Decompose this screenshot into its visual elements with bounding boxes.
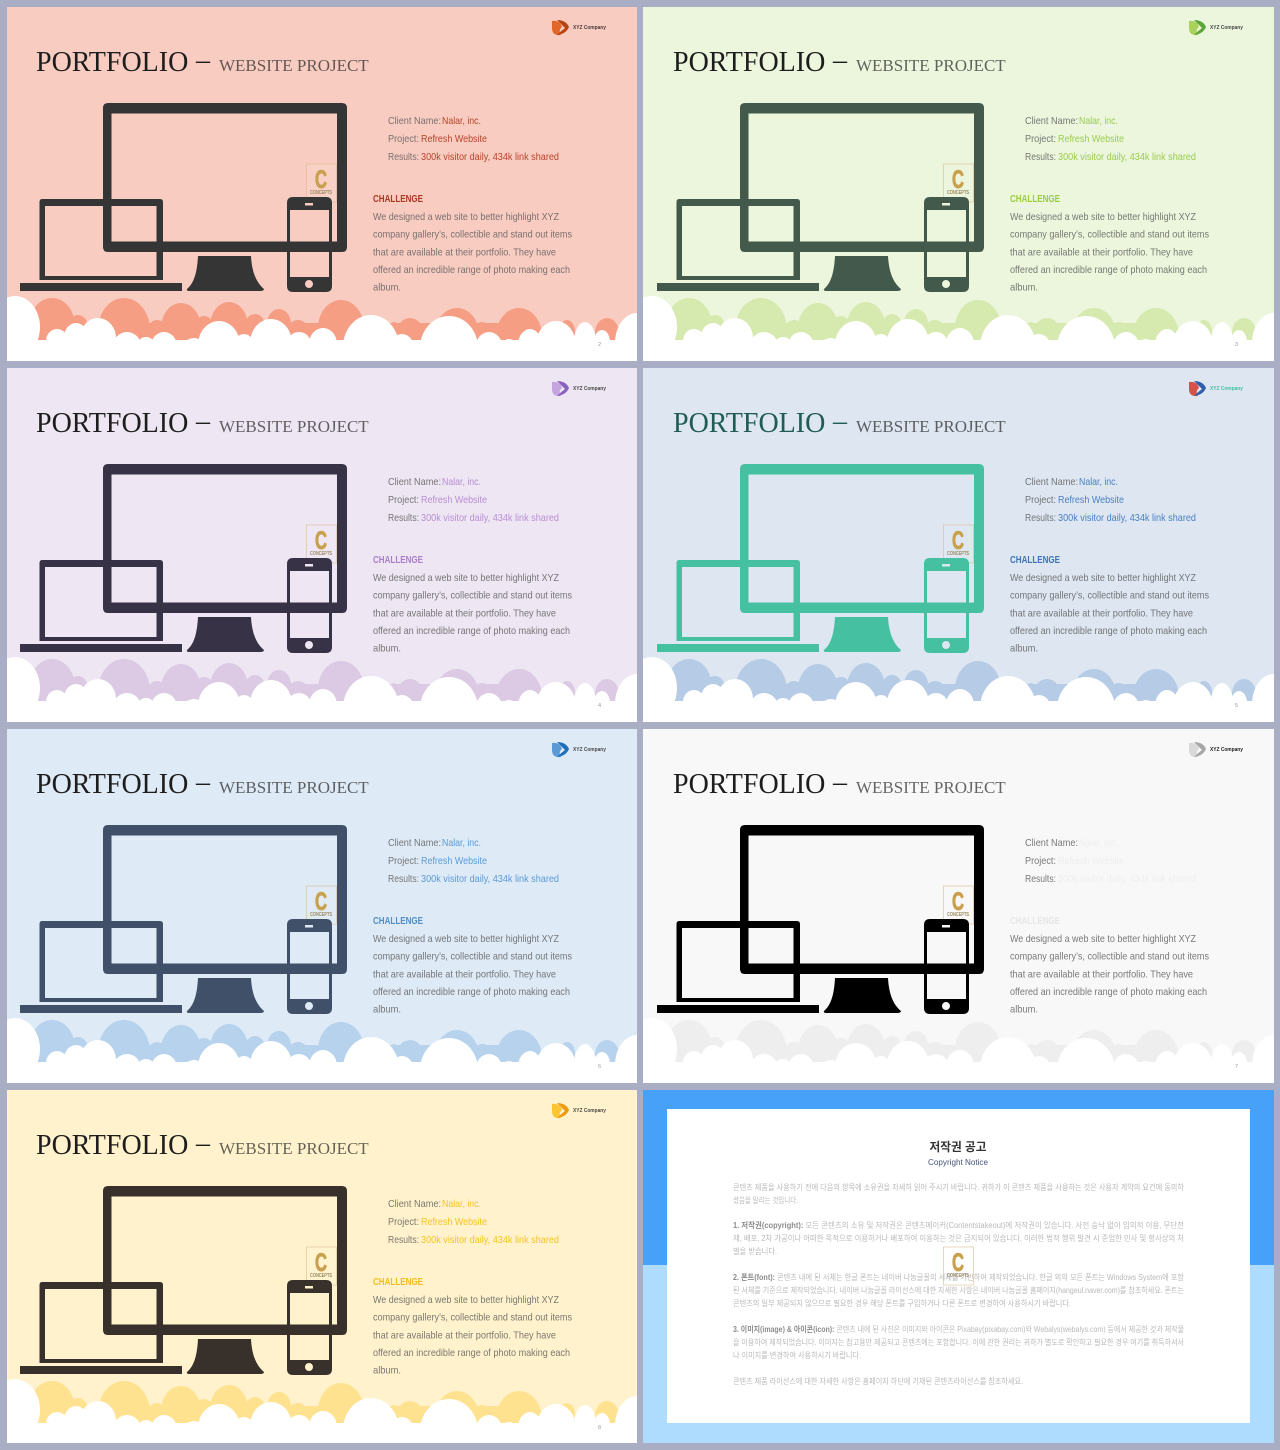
challenge: CHALLENGE — [373, 554, 423, 566]
project details: Refresh Website — [1058, 855, 1124, 867]
project details — [1025, 115, 1196, 163]
project details: Refresh Website — [421, 494, 487, 506]
title: WEBSITE PROJECT — [856, 56, 1006, 75]
challenge: CHALLENGE — [373, 915, 423, 927]
challenge: that are available at their portfolio. They have — [1010, 968, 1193, 980]
challenge: that are available at their portfolio. They have — [1010, 608, 1193, 620]
watermark — [944, 525, 974, 563]
icon: devices — [20, 103, 347, 292]
challenge: that are available at their portfolio. They have — [373, 608, 556, 620]
notice body: 재, 배포, 2차 가공이나 어떠한 목적으로 이용하거나 배포하여 이용하는 것은 금지되어 있습니다. 이러한 법적 행위 발견 시 준엄한 민사 및 형사상의 처 — [733, 1233, 1184, 1243]
challenge — [373, 554, 572, 654]
title: PORTFOLIO — [36, 769, 188, 800]
project details: Results: — [1025, 873, 1056, 885]
title: PORTFOLIO — [36, 47, 188, 78]
notice body: 2. 폰트(font): 콘텐츠 내에 된 서체는 한글 폰트는 네이버 나눔글꼴의 서체를 기반하여 제작되었습니다. 한글 외의 모든 폰트는 Windows System에 포함 — [733, 1272, 1185, 1282]
project details: Nalar, inc. — [1079, 476, 1118, 488]
title: WEBSITE PROJECT — [219, 417, 369, 436]
project details — [1025, 837, 1196, 885]
panel: slide 5 blue-teal — [627, 368, 1280, 741]
notice body: 3. 이미지(image) & 아이콘(icon): 콘텐츠 내에 된 사진은 이미지와 아이콘은 Pixabay(pixabay.com)와 Webalys(webalys.com) 등에서 제공한 것과 제작물 — [733, 1324, 1184, 1334]
logo — [552, 1103, 607, 1118]
notice body: 나 이미지를 변경하여 사용하시기 바랍니다. — [733, 1350, 861, 1360]
page number: 7 — [1235, 1064, 1238, 1070]
title: WEBSITE PROJECT — [856, 778, 1006, 797]
logo: XYZ Company — [1210, 747, 1244, 753]
challenge — [373, 915, 572, 1016]
challenge: album. — [1010, 1004, 1038, 1016]
clouds — [672, 1020, 1255, 1062]
project details: Results: — [1025, 512, 1056, 524]
title: WEBSITE PROJECT — [219, 1139, 369, 1158]
project details: 300k visitor daily, 434k link shared — [421, 151, 559, 163]
project details: Project: — [388, 133, 419, 145]
project details: Project: — [1025, 133, 1056, 145]
challenge: that are available at their portfolio. They have — [1010, 246, 1193, 258]
challenge: We designed a web site to better highlight XYZ — [1010, 933, 1196, 945]
project details: Client Name: — [388, 476, 441, 488]
project details: Client Name: — [1025, 837, 1078, 849]
challenge: We designed a web site to better highlight XYZ — [373, 1294, 559, 1306]
project details: Client Name: — [388, 837, 441, 849]
page number: 2 — [598, 342, 601, 348]
project details: Results: — [1025, 151, 1056, 163]
page number: 8 — [598, 1425, 601, 1431]
challenge: We designed a web site to better highlight XYZ — [1010, 211, 1196, 223]
logo — [1189, 742, 1244, 757]
project details: Nalar, inc. — [442, 115, 481, 127]
title: – — [195, 1128, 211, 1159]
icon: devices — [657, 103, 984, 292]
panel: slide 4 lavender — [0, 368, 659, 741]
challenge: offered an incredible range of photo making each — [373, 1347, 570, 1359]
notice body: 된 서체를 기준으로 제작되었습니다. 네이버 나눔글꼴 라이선스에 대한 자세한 사항은 네이버 나눔글꼴 홈페이지(hangeul.naver.com)를 참조하세요. 폰트는 — [733, 1285, 1184, 1295]
project details: 300k visitor daily, 434k link shared — [421, 1234, 559, 1246]
challenge — [373, 193, 572, 294]
icon: devices — [20, 464, 347, 653]
project details: Project: — [1025, 855, 1056, 867]
logo — [552, 20, 607, 35]
project details: Refresh Website — [421, 855, 487, 867]
challenge: We designed a web site to better highlight XYZ — [373, 211, 559, 223]
title: – — [832, 45, 848, 76]
challenge: CHALLENGE — [1010, 193, 1060, 205]
challenge: offered an incredible range of photo making each — [1010, 264, 1207, 276]
challenge: that are available at their portfolio. They have — [373, 1330, 556, 1342]
challenge — [1010, 554, 1209, 654]
project details: 300k visitor daily, 434k link shared — [1058, 873, 1196, 885]
project details: Refresh Website — [1058, 494, 1124, 506]
challenge: album. — [373, 1004, 401, 1016]
project details — [388, 476, 559, 524]
challenge: offered an incredible range of photo making each — [1010, 625, 1207, 637]
project details: Nalar, inc. — [1079, 115, 1118, 127]
project details: Results: — [388, 1234, 419, 1246]
challenge: company gallery’s, collectible and stand out items — [373, 1312, 572, 1324]
project details: Nalar, inc. — [442, 476, 481, 488]
logo: XYZ Company — [573, 25, 607, 31]
notice body: 콘텐츠의 일부 제공되지 않으므로 필요한 경우 해당 폰트를 구입하거나 다른 폰트로 변경하여 사용하시기 바랍니다. — [733, 1298, 1071, 1308]
title: WEBSITE PROJECT — [219, 778, 369, 797]
challenge: offered an incredible range of photo making each — [373, 986, 570, 998]
clouds — [7, 657, 637, 722]
title: WEBSITE PROJECT — [219, 56, 369, 75]
project details: 300k visitor daily, 434k link shared — [421, 873, 559, 885]
project details: 300k visitor daily, 434k link shared — [421, 512, 559, 524]
challenge: CHALLENGE — [1010, 915, 1060, 927]
project details: Results: — [388, 151, 419, 163]
watermark — [944, 1247, 974, 1285]
challenge: offered an incredible range of photo making each — [1010, 986, 1207, 998]
title — [36, 1128, 369, 1161]
panel: slide 6 sky blue — [0, 729, 659, 1102]
clouds — [7, 1018, 637, 1083]
icon: devices — [657, 825, 984, 1014]
watermark — [306, 525, 336, 563]
challenge: CHALLENGE — [373, 1276, 423, 1288]
title — [36, 45, 369, 78]
challenge: company gallery’s, collectible and stand out items — [1010, 950, 1209, 962]
project details: Client Name: — [1025, 476, 1078, 488]
challenge: album. — [373, 1364, 401, 1376]
challenge: company gallery’s, collectible and stand out items — [373, 590, 572, 602]
title: PORTFOLIO — [673, 47, 825, 78]
notice body: 콘텐츠 제품 라이선스에 대한 자세한 사항은 홈페이지 하단에 기재된 콘텐츠라이선스를 참조하세요. — [733, 1376, 1023, 1386]
icon: devices — [20, 825, 347, 1014]
project details: Client Name: — [1025, 115, 1078, 127]
clouds — [643, 657, 1274, 722]
project details: Project: — [388, 855, 419, 867]
project details — [388, 837, 559, 885]
challenge: CHALLENGE — [373, 193, 423, 205]
page number: 4 — [598, 703, 601, 709]
title — [673, 45, 1006, 78]
watermark — [306, 164, 336, 202]
notice body: 벌을 받습니다. — [733, 1246, 777, 1256]
clouds — [7, 1379, 637, 1443]
challenge: album. — [1010, 282, 1038, 294]
logo: XYZ Company — [573, 1108, 607, 1114]
logo: XYZ Company — [1210, 25, 1244, 31]
challenge — [1010, 193, 1209, 294]
panel: copyright notice — [643, 1090, 1274, 1443]
challenge: We designed a web site to better highlight XYZ — [373, 933, 559, 945]
panel: slide 2 coral — [0, 7, 659, 380]
project details: Nalar, inc. — [442, 1198, 481, 1210]
challenge: offered an incredible range of photo making each — [373, 264, 570, 276]
title: – — [195, 767, 211, 798]
challenge: company gallery’s, collectible and stand out items — [373, 950, 572, 962]
title — [36, 406, 369, 439]
watermark — [944, 164, 974, 202]
notice card — [667, 1109, 1250, 1423]
challenge: offered an incredible range of photo making each — [373, 625, 570, 637]
title: – — [195, 406, 211, 437]
title: PORTFOLIO — [36, 408, 188, 439]
project details: Results: — [388, 512, 419, 524]
notice heading: 저작권 공고 — [930, 1139, 986, 1154]
project details: Refresh Website — [421, 133, 487, 145]
challenge: album. — [373, 282, 401, 294]
challenge: We designed a web site to better highlight XYZ — [373, 572, 559, 584]
panel: slide 8 yellow — [0, 1090, 659, 1450]
project details: Client Name: — [388, 1198, 441, 1210]
notice body: 1. 저작권(copyright): 모든 콘텐츠의 소유 및 저작권은 콘텐츠메이커(Contentstakeout)에 저작권이 있습니다. 사전 승낙 없이 임의적 이용, 무단전 — [733, 1220, 1184, 1230]
panel: slide 7 monochrome — [627, 729, 1280, 1102]
icon: devices — [20, 1186, 347, 1375]
challenge: that are available at their portfolio. They have — [373, 246, 556, 258]
challenge — [373, 1276, 572, 1376]
page number: 6 — [598, 1064, 601, 1070]
project details — [1025, 476, 1196, 524]
logo: XYZ Company — [573, 747, 607, 753]
challenge: company gallery’s, collectible and stand out items — [1010, 228, 1209, 240]
challenge — [1010, 915, 1209, 1016]
project details: Client Name: — [388, 115, 441, 127]
notice body: 셨음을 알리는 것입니다. — [733, 1195, 798, 1205]
project details: Refresh Website — [421, 1216, 487, 1228]
project details — [388, 115, 559, 163]
project details: 300k visitor daily, 434k link shared — [1058, 151, 1196, 163]
title: – — [195, 45, 211, 76]
watermark — [306, 886, 336, 924]
logo: XYZ Company — [573, 386, 607, 392]
logo — [1189, 20, 1244, 35]
logo — [552, 742, 607, 757]
page number: 3 — [1235, 342, 1238, 348]
title: PORTFOLIO — [36, 1130, 188, 1161]
title: PORTFOLIO — [673, 408, 825, 439]
challenge: album. — [373, 642, 401, 654]
clouds — [7, 296, 637, 361]
logo — [552, 381, 607, 396]
panel: slide 3 green — [627, 7, 1280, 380]
title: – — [832, 767, 848, 798]
title: PORTFOLIO — [673, 769, 825, 800]
title — [36, 767, 369, 800]
logo: XYZ Company — [1210, 386, 1244, 392]
notice body — [733, 1182, 1185, 1386]
challenge: We designed a web site to better highlight XYZ — [1010, 572, 1196, 584]
clouds — [643, 296, 1274, 361]
watermark — [306, 1247, 336, 1285]
notice subheading: Copyright Notice — [928, 1158, 989, 1167]
challenge: that are available at their portfolio. They have — [373, 968, 556, 980]
page number: 5 — [1235, 703, 1238, 709]
challenge: album. — [1010, 642, 1038, 654]
title: – — [832, 406, 848, 437]
challenge: company gallery’s, collectible and stand out items — [1010, 590, 1209, 602]
project details: Refresh Website — [1058, 133, 1124, 145]
project details: Nalar, inc. — [442, 837, 481, 849]
project details: Nalar, inc. — [1079, 837, 1118, 849]
project details: Results: — [388, 873, 419, 885]
challenge: CHALLENGE — [1010, 554, 1060, 566]
watermark — [944, 886, 974, 924]
icon: devices — [657, 464, 984, 653]
challenge: company gallery’s, collectible and stand out items — [373, 228, 572, 240]
project details: Project: — [388, 1216, 419, 1228]
project details: 300k visitor daily, 434k link shared — [1058, 512, 1196, 524]
project details — [388, 1198, 559, 1246]
project details: Project: — [1025, 494, 1056, 506]
title: WEBSITE PROJECT — [856, 417, 1006, 436]
notice body: 콘텐츠 제품을 사용하기 전에 다음의 항목에 소유권을 자세히 읽어 주시기 바랍니다. 귀하가 이 콘텐츠 제품을 사용하는 것은 사용자 계약의 요건에 동의하 — [733, 1182, 1185, 1192]
title — [673, 406, 1006, 439]
logo — [1189, 381, 1244, 396]
title — [673, 767, 1006, 800]
project details: Project: — [388, 494, 419, 506]
notice body: 을 이용하여 제작되었습니다. 이미지는 참고용만 제공되고 콘텐츠에는 포함합니다. 이에 관한 권리는 귀하가 별도로 확인하고 필요한 경우 여기를 취득하셔서 — [733, 1337, 1184, 1347]
